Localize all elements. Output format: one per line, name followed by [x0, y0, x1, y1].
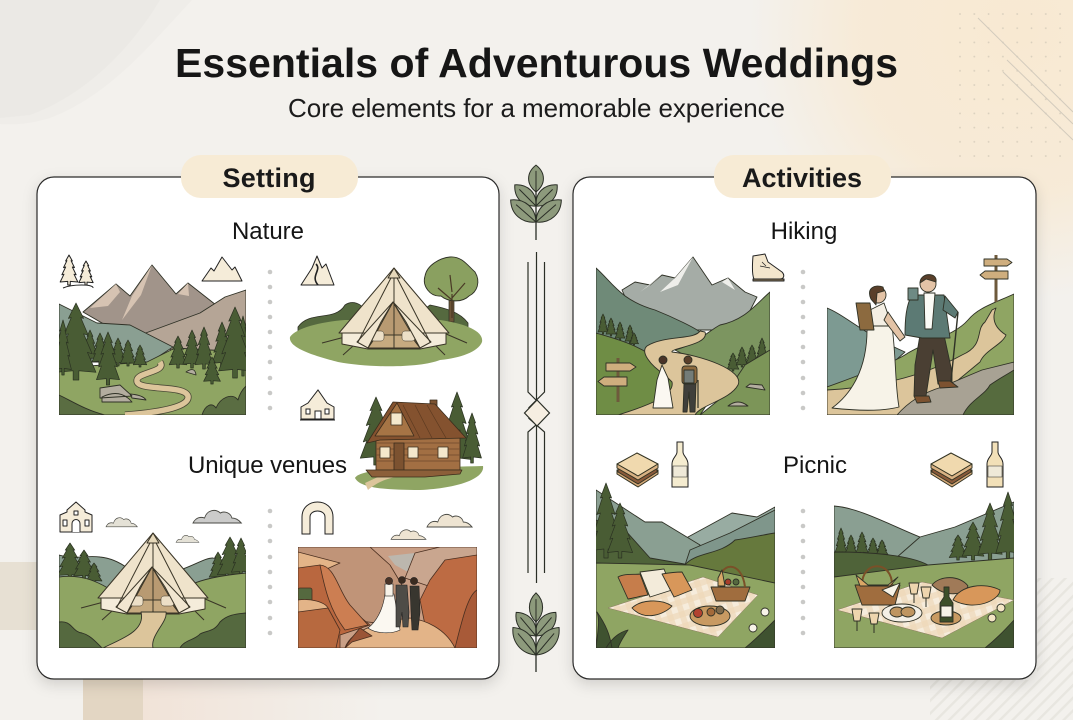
activities heading pill: Activities — [742, 163, 862, 193]
cloud — [193, 510, 241, 523]
scene: hiking couple close-up — [827, 255, 1014, 415]
heading: nature: Nature — [232, 218, 304, 245]
center ornament — [505, 165, 567, 672]
cloud — [427, 514, 472, 527]
dotted divider — [801, 509, 805, 635]
scene: log cabin — [355, 392, 483, 490]
icon: sandwich — [931, 453, 972, 487]
heading: unique venues: Unique venues — [188, 452, 347, 479]
scene: picnic with wine — [834, 492, 1020, 648]
top sprig — [505, 165, 567, 240]
line diamond divider — [524, 252, 550, 583]
scene: glamping tent in hills — [57, 533, 251, 648]
cloud — [176, 535, 199, 542]
icon: small church — [300, 390, 335, 420]
dotted divider — [268, 270, 272, 410]
icon: sandwich — [617, 453, 658, 487]
scene: mountain trail couple — [596, 257, 770, 415]
cloud — [106, 518, 137, 527]
scene: mountain forest — [55, 265, 251, 415]
icon: mountain trail — [301, 256, 334, 285]
scene: bell tent meadow — [290, 257, 482, 366]
bottom sprig — [507, 593, 565, 672]
title: Essentials of Adventurous Weddings — [175, 40, 898, 86]
icon: bottle — [987, 442, 1003, 487]
activities heading pill — [714, 155, 891, 198]
panel: activities — [573, 155, 1036, 679]
icon: bottle — [672, 442, 688, 487]
scene: canyon ceremony — [298, 547, 477, 648]
icon: church — [60, 502, 92, 532]
cloud — [391, 530, 426, 539]
heading: hiking: Hiking — [771, 218, 837, 245]
setting heading pill: Setting — [222, 163, 316, 193]
icon: mountain peaks — [202, 257, 242, 281]
setting heading pill — [181, 155, 358, 198]
icon: pine trees — [60, 255, 93, 288]
subtitle: Core elements for a memorable experience — [288, 93, 785, 123]
panel: setting — [37, 155, 499, 679]
icon: hiking boot — [752, 254, 784, 281]
dotted divider — [268, 509, 272, 635]
dotted divider — [801, 270, 805, 410]
icon: stone arch — [302, 502, 333, 534]
scene: picnic in meadow — [591, 483, 775, 648]
heading: picnic: Picnic — [783, 452, 847, 479]
couple at canyon — [368, 576, 420, 633]
